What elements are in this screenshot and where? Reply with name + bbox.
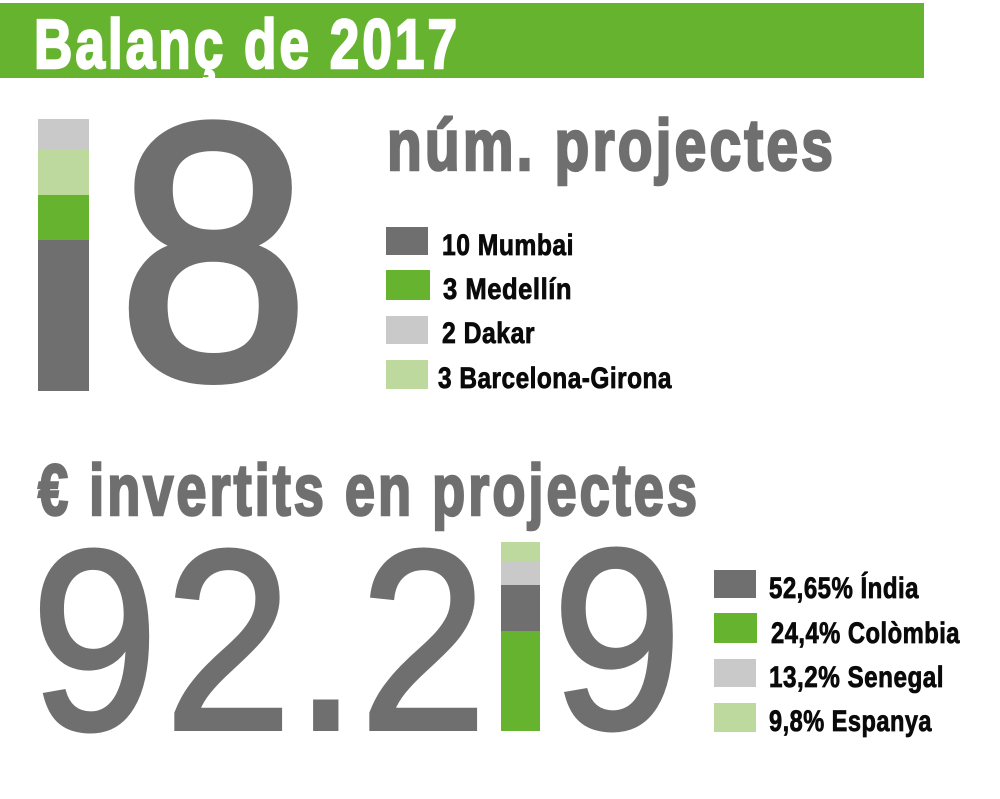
big figure 92.2: 9: [31, 497, 158, 784]
legend: investment by country: 13,2% Senegal: [769, 661, 944, 694]
legend: projects by city: [386, 227, 672, 395]
legend: investment by country: 52,65% Índia: [769, 571, 919, 605]
big figure 92.2: [31, 497, 487, 784]
heading: € invertits en projectes: € invertits en projectes: [38, 451, 700, 531]
title banner: [0, 3, 924, 83]
big digit 9: 9: [552, 497, 682, 783]
big figure 92.2: 2: [360, 497, 487, 784]
title banner: Balanç de 2017: [34, 5, 460, 83]
legend: projects by city: 3 Barcelona-Girona: [438, 362, 672, 395]
big figure 92.2: .: [294, 497, 358, 784]
big digit 8: 8: [118, 49, 309, 456]
legend: projects by city: 3 Medellín: [443, 273, 572, 306]
legend: projects by city: 2 Dakar: [442, 317, 535, 350]
panel: euros invested: [31, 451, 960, 784]
big figure 92.2: 2: [165, 497, 292, 784]
heading: núm. projectes: núm. projectes: [387, 106, 836, 186]
panel: number of projects: [38, 49, 836, 456]
stacked bar: projects forming digit 1: [38, 119, 89, 391]
legend: investment by country: [714, 570, 960, 738]
legend: investment by country: 9,8% Espanya: [769, 705, 932, 738]
legend: projects by city: 10 Mumbai: [442, 229, 574, 262]
stacked bar: investment forming digit 1: [501, 542, 540, 731]
